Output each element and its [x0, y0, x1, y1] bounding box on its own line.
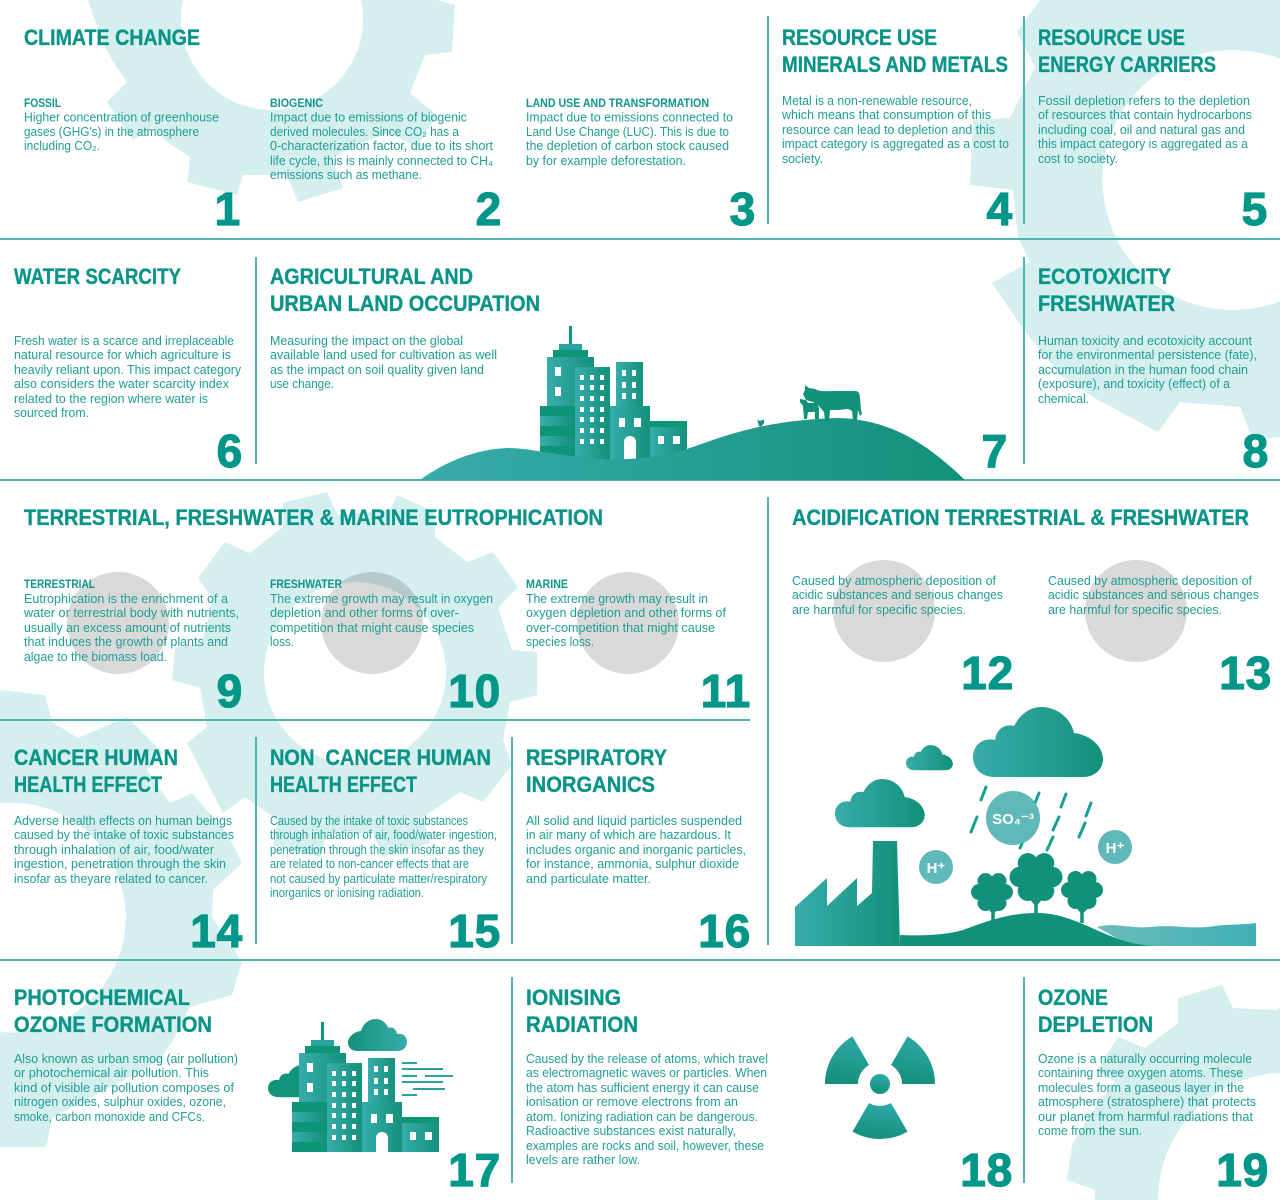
heading: CANCER HUMAN	[14, 745, 178, 770]
number 2: 2	[476, 183, 502, 235]
heading: TERRESTRIAL, FRESHWATER & MARINE EUTROPHICATION	[24, 505, 603, 530]
number 14: 14	[190, 905, 243, 957]
icon: factory smoke cloud	[835, 779, 925, 827]
heading	[14, 745, 178, 797]
text block: terrestrial: TERRESTRIAL	[24, 579, 95, 591]
heading: MINERALS AND METALS	[782, 52, 1008, 77]
heading: RESOURCE USE	[782, 25, 937, 50]
text block: land use and transformation: Land Use Change (LUC). This is due to	[526, 125, 729, 139]
text block: acidification freshwater: are harmful for specific species.	[1048, 603, 1222, 617]
text block: terrestrial: water or terrestrial body with nutrients,	[23, 606, 239, 620]
text block: acidification terrestrial: acidic substances and serious changes	[792, 588, 1003, 602]
body text: Caused by the release of atoms, which travel	[526, 1052, 768, 1066]
body text: including coal, oil and natural gas and	[1038, 123, 1245, 137]
body text: come from the sun.	[1038, 1124, 1142, 1138]
text block: marine: oxygen depletion and other forms of	[526, 606, 727, 620]
body text	[781, 94, 1009, 166]
body text: natural resource for which agriculture is	[14, 348, 231, 362]
body text: as the impact on soil quality given land	[270, 363, 484, 377]
text block: freshwater: loss.	[270, 635, 294, 649]
body text: accumulation in the human food chain	[1038, 363, 1248, 377]
body text: Adverse health effects on human beings	[14, 814, 232, 828]
body text: in air many of which are hazardous. It	[526, 828, 732, 842]
body text: use change.	[270, 377, 334, 391]
body text: examples are rocks and soil, however, these	[526, 1139, 764, 1153]
text block: terrestrial: Eutrophication is the enrichment of a	[24, 592, 228, 606]
body text: Fresh water is a scarce and irreplaceable	[14, 334, 234, 348]
text block: land use and transformation: by for example deforestation.	[526, 154, 686, 168]
heading	[270, 745, 491, 797]
body text: also considers the water scarcity index	[14, 377, 230, 391]
text block: land use and transformation: Impact due to emissions connected to	[526, 110, 733, 124]
body text: All solid and liquid particles suspended	[526, 814, 742, 828]
heading	[1038, 25, 1216, 77]
heading: RESPIRATORY	[526, 745, 667, 770]
body text: through inhalation of air, food/water	[14, 843, 214, 857]
text block: marine: The extreme growth may result in	[526, 592, 708, 606]
number 19: 19	[1216, 1144, 1269, 1196]
body text: atom. Ionizing radiation can be dangerous.	[526, 1110, 758, 1124]
text block: acidification freshwater: Caused by atmospheric deposition of	[1048, 574, 1253, 588]
panel: ionising radiation	[526, 985, 1013, 1196]
body text: of resources that contain hydrocarbons	[1038, 108, 1252, 122]
body text: Also known as urban smog (air pollution)	[14, 1052, 238, 1066]
heading: NON CANCER HUMAN	[270, 745, 491, 770]
body text: atmosphere (stratosphere) that protects	[1038, 1095, 1256, 1109]
text block: biogenic: life cycle, this is mainly connected to CH₄	[270, 154, 493, 168]
bubble: SO4: SO₄⁻³	[992, 811, 1034, 828]
body text	[14, 814, 234, 886]
text block: terrestrial	[23, 579, 239, 664]
bubble: SO4	[986, 791, 1040, 845]
body text: and particulate matter.	[526, 872, 651, 886]
heading: DEPLETION	[1038, 1012, 1153, 1037]
heading: ENERGY CARRIERS	[1038, 52, 1216, 77]
body text: not caused by particulate matter/respiratory	[270, 872, 488, 886]
heading: AGRICULTURAL AND	[270, 264, 473, 289]
text block: fossil: gases (GHG's) in the atmosphere	[24, 125, 199, 139]
text block: acidification terrestrial: are harmful for specific species.	[792, 603, 966, 617]
heading: IONISING	[526, 985, 621, 1010]
body text: for instance, ammonia, sulphur dioxide	[526, 857, 739, 871]
text block: marine: species loss.	[526, 635, 594, 649]
body text: heavily reliant upon. This impact category	[14, 363, 242, 377]
bubble: H+ right: H⁺	[1106, 840, 1124, 857]
text block: biogenic: derived molecules. Since CO₂ has a	[270, 125, 459, 139]
body text	[1038, 1052, 1256, 1138]
body text: (exposure), and toxicity (effect) of a	[1038, 377, 1230, 391]
bubble: H+ right	[1098, 830, 1132, 864]
body text: our planet from harmful radiations that	[1038, 1110, 1254, 1124]
body text: sourced from.	[14, 406, 89, 420]
text block: freshwater	[270, 579, 493, 649]
text block: terrestrial: usually an excess amount of nutrients	[24, 621, 231, 635]
body text: impact category is aggregated as a cost to	[782, 137, 1009, 151]
number 13: 13	[1219, 647, 1272, 699]
text block: land use and transformation: LAND USE AND TRANSFORMATION	[526, 98, 709, 110]
heading: ECOTOXICITY	[1038, 264, 1171, 289]
panel: agricultural and urban land occupation	[270, 264, 1008, 480]
body text: related to the region where water is	[14, 392, 208, 406]
text block: fossil: including CO₂.	[24, 139, 100, 153]
body text: for the environmental persistence (fate),	[1038, 348, 1257, 362]
body text: Ozone is a naturally occurring molecule	[1038, 1052, 1252, 1066]
panel: resource use minerals and metals	[781, 25, 1013, 235]
ground hill	[900, 913, 1153, 946]
text block: biogenic: BIOGENIC	[270, 98, 323, 110]
number 3: 3	[730, 183, 756, 235]
body text	[526, 1052, 768, 1167]
text block: biogenic: emissions such as methane.	[270, 168, 422, 182]
text block: acidification freshwater: acidic substances and serious changes	[1048, 588, 1259, 602]
body text: cost to society.	[1038, 152, 1118, 166]
rain dashes	[971, 787, 1091, 850]
panel: ecotoxicity freshwater	[1038, 264, 1269, 477]
body text: available land used for cultivation as well	[270, 348, 497, 362]
heading: FRESHWATER	[1038, 291, 1175, 316]
panel: acidification	[792, 505, 1272, 946]
panel: photochemical ozone formation	[14, 985, 501, 1196]
text block: biogenic: 0-characterization factor, due to its short	[270, 139, 494, 153]
text block: biogenic	[270, 98, 494, 182]
illustration: smoggy city	[268, 1019, 453, 1158]
heading: OZONE	[1038, 985, 1108, 1010]
body text	[1038, 334, 1257, 406]
heading: OZONE FORMATION	[14, 1012, 212, 1037]
body text: inorganics or ionising radiation.	[270, 886, 424, 900]
text block: freshwater: FRESHWATER	[270, 579, 343, 591]
body text: Radioactive substances exist naturally,	[526, 1124, 736, 1138]
body text: containing three oxygen atoms. These	[1038, 1066, 1243, 1080]
body text: ionisation or remove electrons from an	[526, 1095, 738, 1109]
heading	[14, 985, 212, 1037]
body text: this impact category is aggregated as a	[1038, 137, 1248, 151]
heading: URBAN LAND OCCUPATION	[270, 291, 540, 316]
text block: acidification terrestrial	[792, 574, 1003, 617]
text block: acidification freshwater	[1048, 574, 1259, 617]
text block: freshwater: The extreme growth may result in oxygen	[270, 592, 493, 606]
body text: or photochemical air pollution. This	[14, 1066, 209, 1080]
body text: Caused by the intake of toxic substances	[270, 814, 468, 828]
text block: freshwater: competition that might cause species	[270, 621, 474, 635]
body text: chemical.	[1038, 392, 1089, 406]
number 15: 15	[448, 905, 501, 957]
number 7: 7	[982, 425, 1008, 477]
body text: Metal is a non-renewable resource,	[782, 94, 972, 108]
text block: biogenic: Impact due to emissions of biogenic	[270, 110, 467, 124]
body text: insofar as theyare related to cancer.	[14, 872, 208, 886]
heading	[270, 264, 540, 316]
body text: caused by the intake of toxic substances	[14, 828, 234, 842]
heading	[1038, 985, 1153, 1037]
text block: marine: MARINE	[526, 579, 568, 591]
heading	[526, 985, 638, 1037]
number 10: 10	[448, 665, 501, 717]
heading: PHOTOCHEMICAL	[14, 985, 190, 1010]
body text: the atom has sufficient energy it can cause	[526, 1081, 759, 1095]
text block: land use and transformation	[526, 98, 733, 168]
heading	[526, 745, 667, 797]
body text: levels are rather low.	[526, 1153, 640, 1167]
body text	[270, 334, 497, 391]
icon: large rain cloud	[973, 707, 1103, 777]
factory	[795, 841, 900, 946]
panel: cancer human health effect	[14, 745, 243, 957]
body text: includes organic and inorganic particles,	[526, 843, 746, 857]
heading: climate change: CLIMATE CHANGE	[24, 25, 200, 50]
text block: fossil: Higher concentration of greenhouse	[24, 110, 219, 124]
body text: as electromagnetic waves or particles. When	[526, 1066, 767, 1080]
heading	[1038, 264, 1175, 316]
body text: ingestion, penetration through the skin	[14, 857, 226, 871]
heading: INORGANICS	[526, 772, 655, 797]
icon: radiation trefoil	[825, 1036, 935, 1139]
body text: resource can lead to depletion and this	[782, 123, 995, 137]
text block: marine: over-competition that might cause	[526, 621, 715, 635]
text block: terrestrial: that induces the growth of plants and	[24, 635, 228, 649]
heading: HEALTH EFFECT	[270, 772, 417, 797]
number 1: 1	[215, 183, 241, 235]
body text: kind of visible air pollution composes of	[14, 1081, 235, 1095]
panel: water scarcity	[14, 264, 243, 477]
bubble: H+ left	[919, 850, 953, 884]
water	[1097, 923, 1256, 946]
number 8: 8	[1243, 425, 1269, 477]
text block: fossil: FOSSIL	[24, 98, 61, 110]
body text: society.	[782, 152, 823, 166]
text block: freshwater: depletion and other forms of over-	[270, 606, 459, 620]
body text: penetration through the skin insofar as they	[270, 843, 485, 857]
heading: WATER SCARCITY	[14, 264, 181, 289]
text block: marine	[526, 579, 727, 649]
heading	[782, 25, 1008, 77]
text block: terrestrial: algae to the biomass load.	[24, 650, 167, 664]
trees	[971, 853, 1103, 923]
heading: HEALTH EFFECT	[14, 772, 162, 797]
panel: resource use energy carriers	[1038, 25, 1268, 235]
number 4: 4	[987, 183, 1013, 235]
heading: RADIATION	[526, 1012, 638, 1037]
bubble: H+ left: H⁺	[927, 860, 945, 877]
body text: which means that consumption of this	[781, 108, 991, 122]
body text: through inhalation of air, food/water ingestion,	[270, 828, 497, 842]
body text	[270, 814, 497, 900]
number 11: 11	[701, 665, 751, 717]
illustration: acid rain over factory and trees	[795, 707, 1256, 946]
body text: nitrogen oxides, sulphur oxides, ozone,	[14, 1095, 226, 1109]
gray placeholder circles	[67, 560, 1187, 674]
body text	[526, 814, 746, 886]
body text: Measuring the impact on the global	[270, 334, 463, 348]
number 12: 12	[961, 647, 1014, 699]
panel: ozone depletion	[1038, 985, 1269, 1196]
body text: are related to non-cancer effects that are	[270, 857, 469, 871]
panel: non cancer human health effect	[270, 745, 501, 957]
body text	[14, 334, 242, 420]
heading: RESOURCE USE	[1038, 25, 1185, 50]
panel: respiratory inorganics	[526, 745, 751, 957]
body text: smoke, carbon monoxide and CFCs.	[14, 1110, 205, 1124]
body text	[1038, 94, 1252, 166]
body text: Fossil depletion refers to the depletion	[1038, 94, 1250, 108]
number 17: 17	[448, 1144, 501, 1196]
body text: Human toxicity and ecotoxicity account	[1038, 334, 1253, 348]
illustration: city on a hill with cow	[420, 326, 965, 480]
icon: small cloud	[906, 745, 953, 770]
number 5: 5	[1242, 183, 1268, 235]
number 18: 18	[960, 1144, 1013, 1196]
text block: land use and transformation: the depletion of carbon stock caused	[526, 139, 729, 153]
number 6: 6	[217, 425, 243, 477]
number 9: 9	[217, 665, 243, 717]
panel: eutrophication	[23, 505, 751, 717]
body text	[14, 1052, 238, 1124]
text block: acidification terrestrial: Caused by atmospheric deposition of	[792, 574, 997, 588]
panel: climate change	[24, 25, 756, 235]
body text: molecules form a gaseous layer in the	[1038, 1081, 1244, 1095]
text block: fossil	[24, 98, 219, 153]
number 16: 16	[698, 905, 751, 957]
